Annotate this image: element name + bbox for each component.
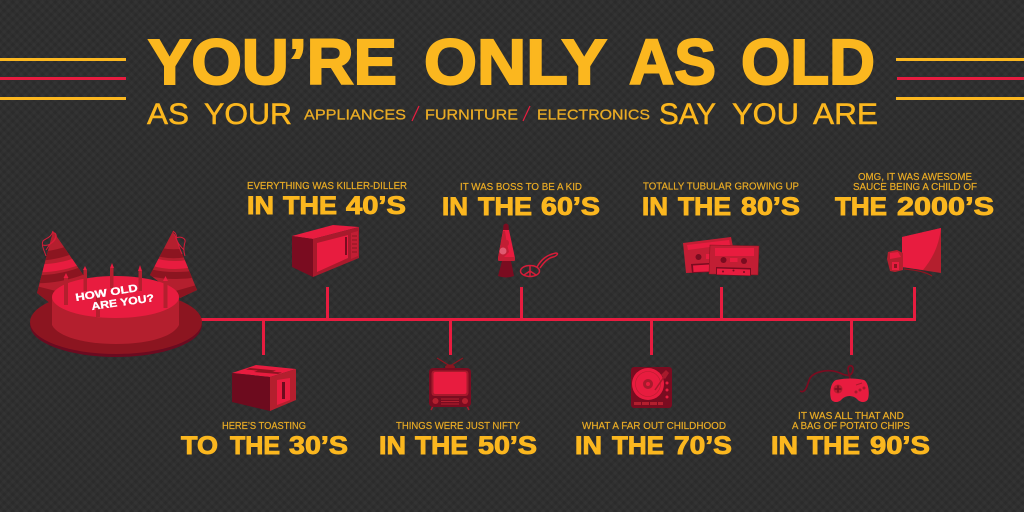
- icon: cassette tapes: [683, 237, 759, 276]
- icon: lava lamp: [498, 224, 515, 278]
- heading: THE: [835, 193, 887, 221]
- right party hat: [150, 230, 197, 298]
- heading: THE: [612, 432, 664, 460]
- caption: TOTALLY TUBULAR GROWING UP: [643, 182, 799, 192]
- heading: [181, 432, 348, 460]
- heading: IN: [379, 432, 406, 460]
- title: OLD: [741, 26, 875, 98]
- caption: IT WAS BOSS TO BE A KID: [460, 182, 582, 193]
- heading: THE: [230, 432, 280, 460]
- panel: 1940s: [247, 181, 407, 277]
- title: [148, 26, 875, 98]
- cake top: [52, 276, 179, 318]
- panel: 1990s: [771, 366, 930, 460]
- heading: IN: [442, 193, 468, 221]
- subtitle: ARE: [813, 98, 878, 131]
- caption: [792, 411, 910, 432]
- left party hat: [37, 230, 84, 302]
- heading: IN: [771, 432, 798, 460]
- heading: TO: [181, 432, 218, 460]
- heading: [642, 193, 800, 221]
- heading: IN: [247, 192, 274, 220]
- panel: 1930s: [181, 365, 348, 460]
- caption: OMG, IT WAS AWESOME: [858, 172, 972, 183]
- plate: [30, 293, 202, 357]
- caption: HERE’S TOASTING: [222, 421, 306, 432]
- caption: IT WAS ALL THAT AND: [798, 411, 904, 422]
- heading: IN: [575, 432, 602, 460]
- heading: THE: [478, 193, 532, 221]
- heading: IN: [642, 193, 668, 221]
- caption: WHAT A FAR OUT CHILDHOOD: [582, 421, 726, 432]
- panel: 1960s: [442, 182, 600, 278]
- panel: 2000s: [835, 172, 994, 276]
- heading: [379, 432, 537, 460]
- candles: [64, 263, 168, 317]
- panel: 1950s: [379, 358, 537, 460]
- subtitle: AS: [147, 98, 189, 131]
- subtitle: SAY: [659, 98, 716, 131]
- subtitle: FURNITURE: [425, 106, 518, 124]
- cake message: ARE YOU?: [91, 292, 155, 313]
- heading: [771, 432, 930, 460]
- cake message: [75, 282, 155, 313]
- heading: 80’S: [741, 193, 800, 221]
- heading: THE: [678, 193, 731, 221]
- right title rules: [896, 58, 1024, 100]
- title: AS: [629, 26, 716, 98]
- caption: A BAG OF POTATO CHIPS: [792, 421, 910, 432]
- caption: THINGS WERE JUST NIFTY: [396, 421, 520, 432]
- heading: 60’S: [541, 193, 600, 221]
- heading: [247, 192, 406, 220]
- left title rules: [0, 58, 126, 100]
- heading: 90’S: [870, 432, 930, 460]
- heading: [835, 193, 994, 221]
- cake message: HOW OLD: [75, 282, 139, 304]
- panel: 1970s: [575, 367, 732, 460]
- heading: [442, 193, 600, 221]
- icon: toaster: [232, 365, 296, 411]
- heading: THE: [283, 192, 337, 220]
- subtitle: APPLIANCES: [304, 106, 406, 124]
- heading: 30’S: [289, 432, 348, 460]
- icon: game controller: [800, 366, 869, 402]
- icon: megaphone: [887, 228, 941, 276]
- heading: THE: [807, 432, 860, 460]
- heading: 70’S: [674, 432, 732, 460]
- icon: television: [429, 358, 471, 410]
- heading: THE: [415, 432, 468, 460]
- icon: peace necklace: [520, 253, 557, 276]
- subtitle: [147, 98, 878, 131]
- timeline: [200, 287, 916, 355]
- subtitle: ELECTRONICS: [537, 106, 650, 124]
- heading: 2000’S: [897, 193, 994, 221]
- icon: turntable: [631, 367, 672, 408]
- subtitle: YOU: [732, 98, 799, 131]
- heading: [575, 432, 732, 460]
- heading: 50’S: [478, 432, 537, 460]
- cake body: [52, 297, 179, 344]
- title: YOU’RE: [148, 26, 397, 98]
- icon: birthday cake with party hats: [30, 231, 205, 357]
- panel: 1980s: [642, 182, 800, 276]
- subtitle: YOUR: [204, 98, 292, 131]
- caption: [853, 172, 977, 193]
- heading: 40’S: [346, 192, 406, 220]
- caption: EVERYTHING WAS KILLER-DILLER: [247, 181, 407, 192]
- caption: SAUCE BEING A CHILD OF: [853, 182, 977, 193]
- icon: microwave: [292, 225, 359, 277]
- title: ONLY: [424, 26, 607, 98]
